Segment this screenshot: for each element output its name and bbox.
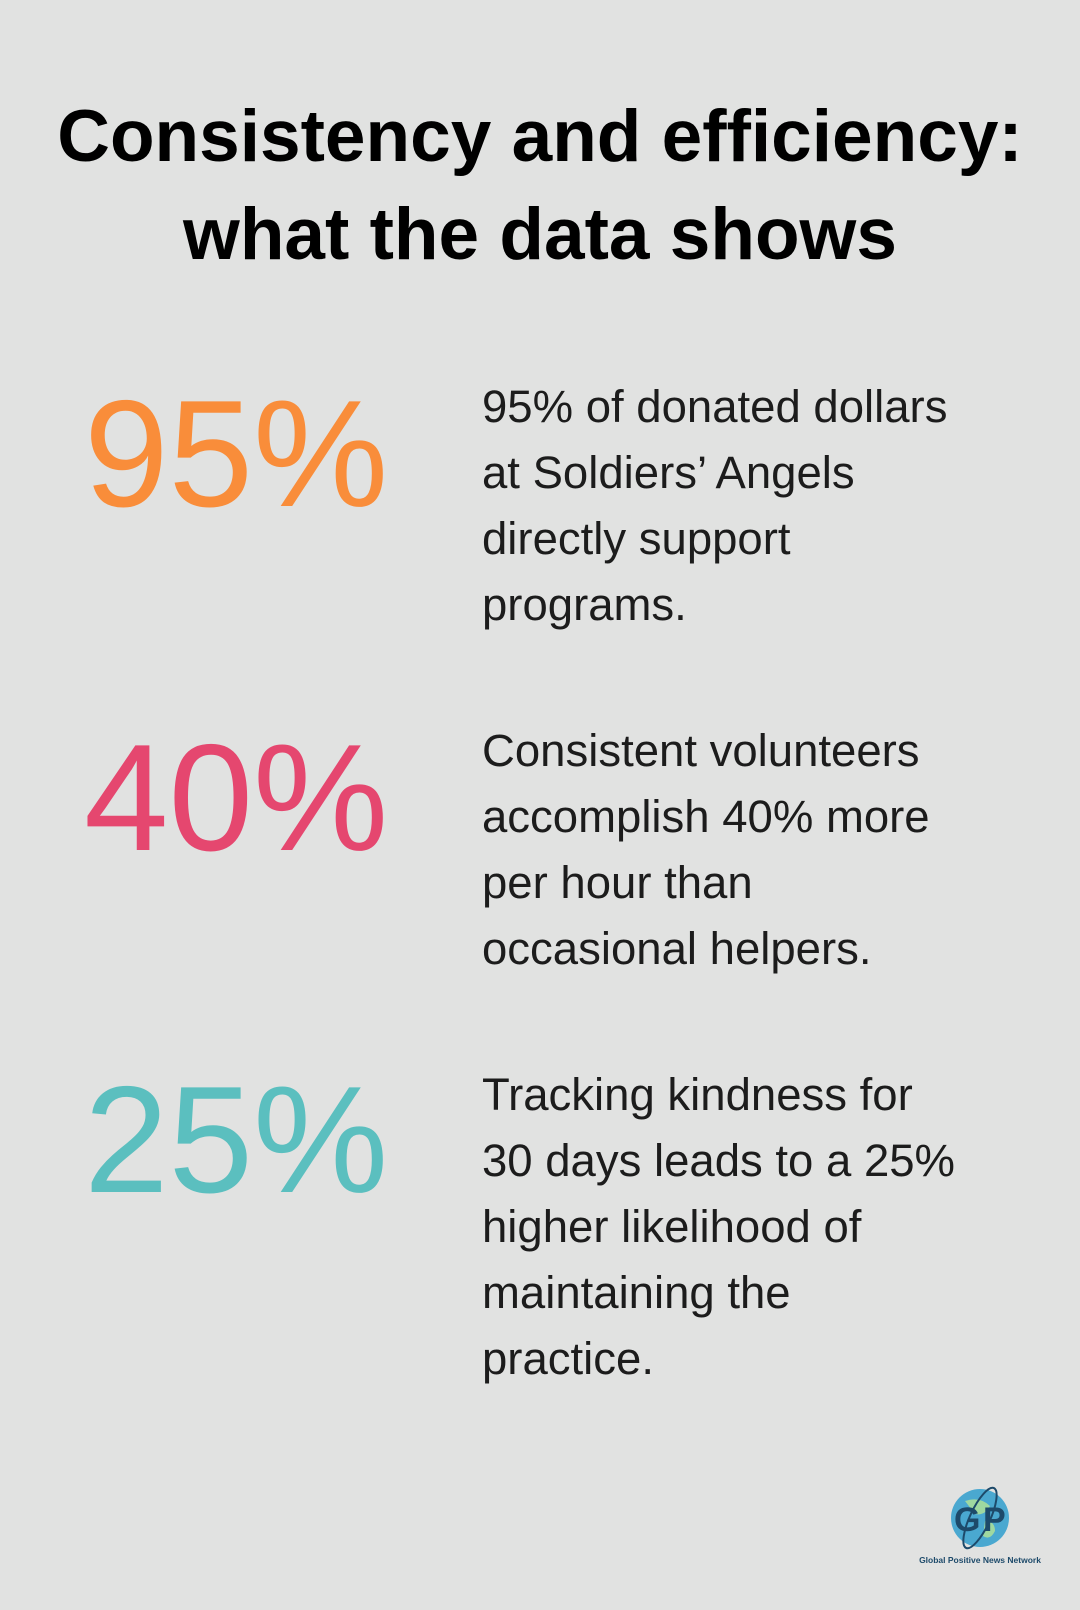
logo: P — [983, 1501, 1006, 1539]
text: 25% description — [482, 1069, 955, 1384]
text: 25% description: maintaining the — [482, 1267, 791, 1318]
text: 25% description: higher likelihood of — [482, 1201, 861, 1252]
logo: Global Positive News Network — [919, 1555, 1041, 1565]
text: 25% description: Tracking kindness for — [482, 1069, 913, 1120]
text: 25% description: 30 days leads to a 25% — [482, 1135, 955, 1186]
logo — [919, 1486, 1041, 1565]
text: 40% description: accomplish 40% more — [482, 791, 930, 842]
title: Consistency and efficiency: — [57, 96, 1023, 177]
text: 40% description — [482, 725, 930, 974]
text: 95% description: at Soldiers’ Angels — [482, 447, 855, 498]
stat: 95%: 95% — [84, 369, 388, 539]
text: 95% description — [482, 381, 947, 630]
text: 40% description: occasional helpers. — [482, 923, 872, 974]
stat: 25%: 25% — [84, 1055, 388, 1225]
text: 40% description: per hour than — [482, 857, 753, 908]
text: 40% description: Consistent volunteers — [482, 725, 920, 776]
stat: 40%: 40% — [84, 713, 388, 883]
title — [57, 96, 1023, 275]
text: 95% description: 95% of donated dollars — [482, 381, 947, 432]
text: 25% description: practice. — [482, 1333, 654, 1384]
logo: G — [954, 1501, 980, 1539]
title: what the data shows — [183, 194, 897, 275]
text: 95% description: directly support — [482, 513, 791, 564]
text: 95% description: programs. — [482, 579, 687, 630]
